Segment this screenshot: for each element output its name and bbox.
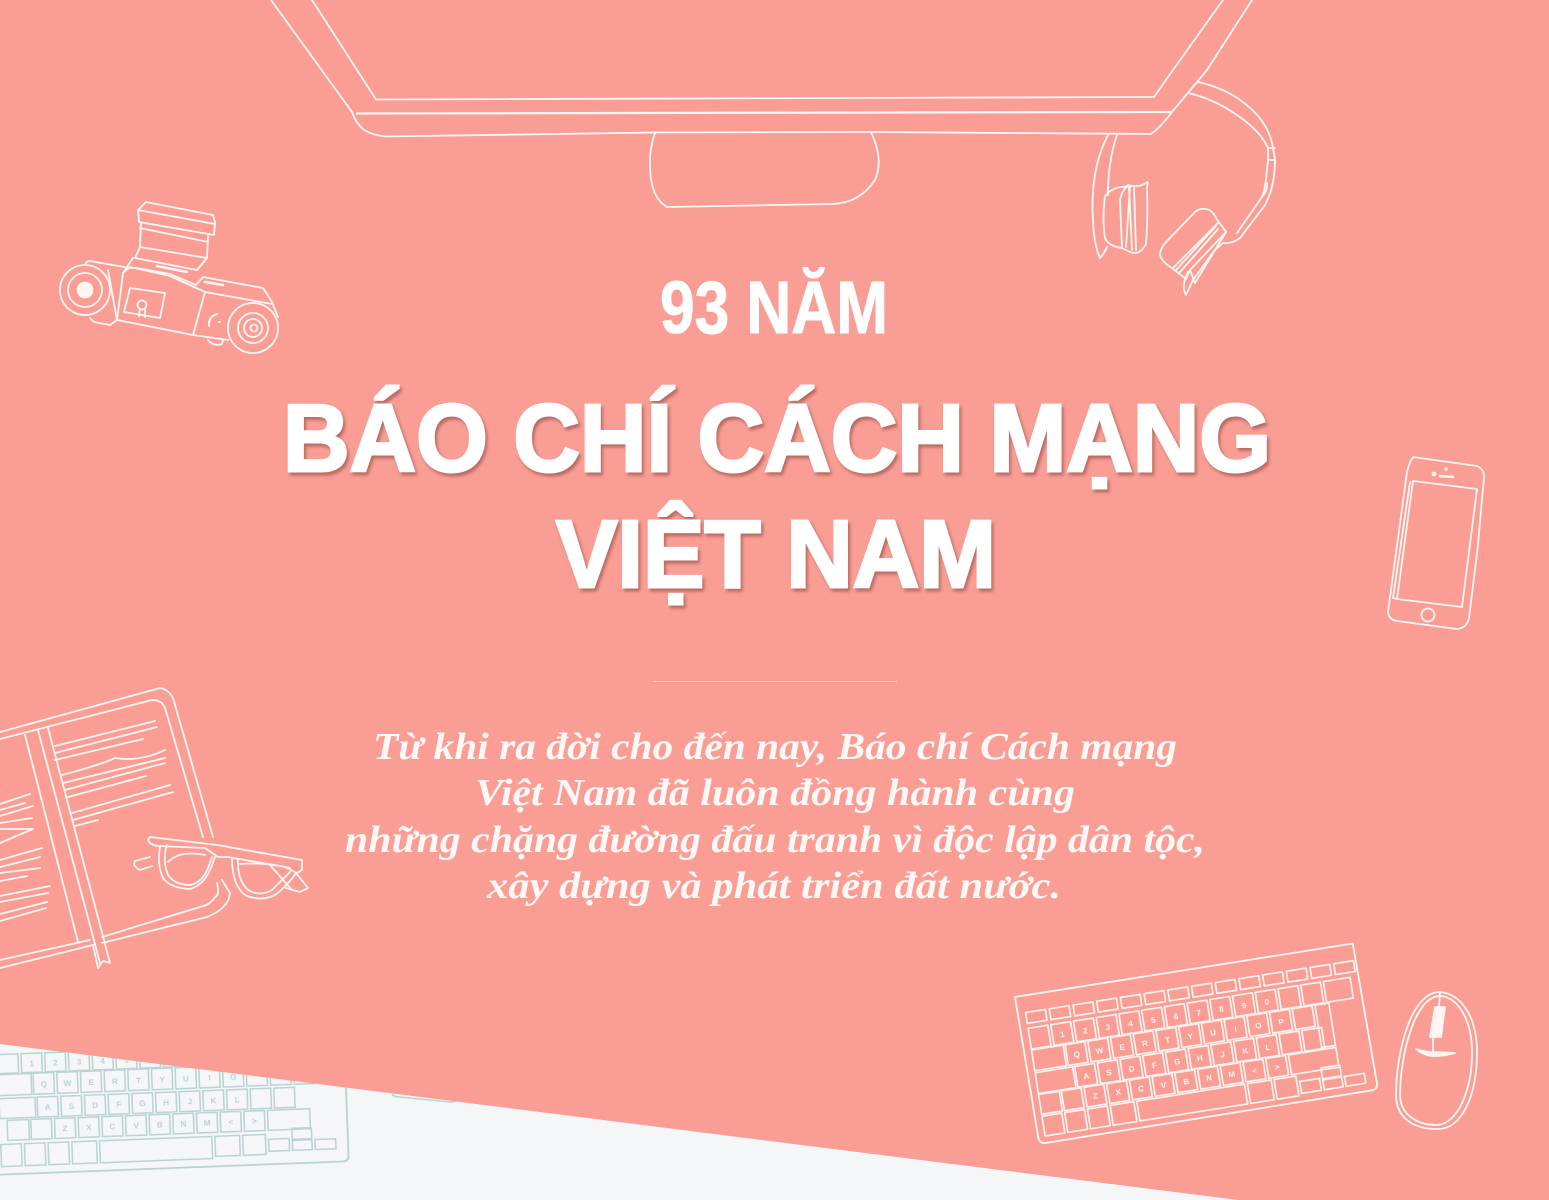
intro paragraph: xây dựng và phát triển đất nước.: [486, 865, 1061, 907]
icon: keyboard: 1234567890: [1060, 997, 1270, 1039]
icon: faded keyboard on footer: 12345: [29, 1056, 129, 1068]
icon: keyboard: [1015, 943, 1378, 1144]
icon: faded mouse edge on footer: [392, 1094, 457, 1102]
icon: monitor: [271, 0, 1252, 207]
main title: BÁO CHÍ CÁCH MẠNG: [283, 385, 1271, 492]
icon: camera: [60, 202, 278, 353]
subtitle: 93 năm: 93 NĂM: [660, 266, 888, 349]
icon: headphones: [1093, 82, 1275, 295]
icon: keyboard: QWERTYUIOP: [1073, 1017, 1285, 1059]
light footer background: [0, 1030, 1549, 1200]
icon: faded keyboard on footer: ZXCVBNM<>: [62, 1117, 257, 1133]
icon: keyboard: ASDFGHJKL: [1083, 1043, 1271, 1081]
icon: faded keyboard on footer: QWERTYUIO: [40, 1073, 237, 1089]
main title: VIỆT NAM: [556, 500, 996, 608]
intro paragraph: [345, 726, 1205, 907]
icon: keyboard: ZXCVBNM<>: [1092, 1062, 1281, 1101]
intro paragraph: những chặng đường đấu tranh vì độc lập dân tộc,: [345, 819, 1205, 861]
icon: notebook: [0, 688, 230, 968]
icon: faded keyboard on footer: ASDFGHJKL: [45, 1095, 240, 1112]
intro paragraph: Từ khi ra đời cho đến nay, Báo chí Cách mạng: [373, 726, 1177, 768]
icon: faded keyboard on footer: [0, 1013, 349, 1175]
main title: [283, 385, 1271, 608]
icon: glasses: [134, 837, 308, 898]
icon: smartphone: [1388, 457, 1484, 629]
intro paragraph: Việt Nam đã luôn đồng hành cùng: [475, 772, 1075, 814]
divider line: [653, 681, 897, 682]
icon: mouse: [1396, 992, 1477, 1129]
